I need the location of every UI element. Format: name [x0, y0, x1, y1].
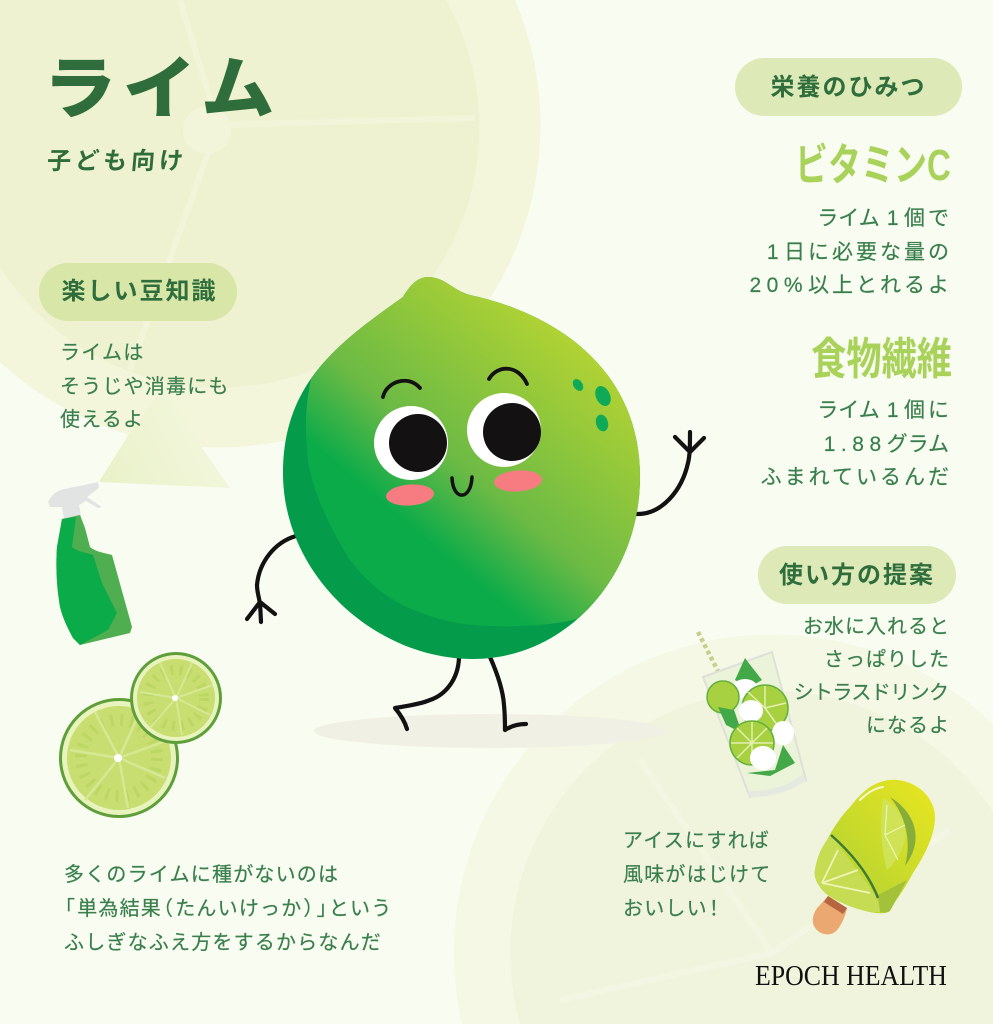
heading: vitamin C: ビタミンC	[795, 141, 951, 190]
heading: dietary fiber: 食物繊維	[811, 335, 952, 384]
text: fiber detail: ふまれているんだ	[761, 466, 952, 489]
text: vitamin C detail: ライム 1個で	[817, 207, 952, 230]
text: ice suggestion: おいしい！	[623, 898, 720, 920]
icon: large lime slice	[59, 698, 179, 818]
text: ice suggestion: アイスにすれば	[623, 830, 770, 852]
icon: lime popsicle	[813, 780, 935, 934]
icon: spray bottle	[48, 482, 132, 645]
text: drink suggestion: になるよ	[866, 715, 950, 737]
cheeks	[385, 469, 543, 507]
heading: usage ideas: 使い方の提案	[779, 562, 935, 589]
text: drink suggestion: シトラスドリンク	[794, 682, 948, 704]
mouth	[452, 477, 472, 495]
text: seedless fact	[64, 864, 392, 954]
title: ライム	[44, 52, 281, 127]
text: cleaning fact: そうじや消毒にも	[60, 376, 230, 398]
eyebrows	[383, 369, 527, 397]
lime character	[247, 250, 704, 730]
right eye	[467, 393, 541, 467]
text: ice suggestion	[623, 830, 771, 920]
arms and legs	[247, 432, 704, 730]
lime body	[283, 277, 640, 659]
text: drink suggestion: お水に入れると	[803, 616, 950, 638]
text: vitamin C detail: 1日に必要な量の	[767, 240, 952, 264]
text: vitamin C detail	[749, 207, 952, 297]
text: ice suggestion: 風味がはじけて	[623, 864, 771, 886]
text: fiber detail: 1.88グラム	[824, 432, 949, 456]
logo: EPOCH HEALTH	[755, 960, 947, 992]
text: fiber detail: ライム 1個に	[817, 399, 952, 422]
heading: nutrition secrets	[735, 58, 962, 116]
text: fiber detail	[761, 399, 952, 489]
text: seedless fact: 「単為結果（たんいけっか）」という	[65, 898, 392, 920]
heading: usage ideas	[758, 546, 956, 604]
text: cleaning fact	[60, 342, 230, 431]
subtitle: 子ども向け	[46, 148, 188, 175]
text: drink suggestion	[794, 616, 950, 737]
background lime slice: bottom right	[454, 635, 993, 1024]
text: seedless fact: ふしぎなふえ方をするからなんだ	[64, 932, 382, 954]
text: seedless fact: 多くのライムに種がないのは	[64, 864, 339, 886]
text: vitamin C detail: 20%以上とれるよ	[749, 274, 952, 297]
heading: fun facts: 楽しい豆知識	[62, 278, 218, 305]
text: cleaning fact: 使えるよ	[60, 409, 144, 431]
heading: nutrition secrets: 栄養のひみつ	[770, 74, 926, 101]
background lime slice: top left	[0, 0, 540, 447]
text: drink suggestion: さっぱりした	[824, 649, 950, 671]
lime pores	[571, 377, 614, 433]
ground shadow	[314, 714, 666, 748]
left eye	[374, 406, 448, 480]
heading: fun facts	[39, 263, 237, 321]
icon: lime drink glass	[698, 632, 806, 797]
text: cleaning fact: ライムは	[60, 342, 144, 364]
lime body highlight	[306, 277, 640, 626]
spray mist cone	[99, 385, 230, 488]
icon: small lime slice	[130, 652, 222, 744]
